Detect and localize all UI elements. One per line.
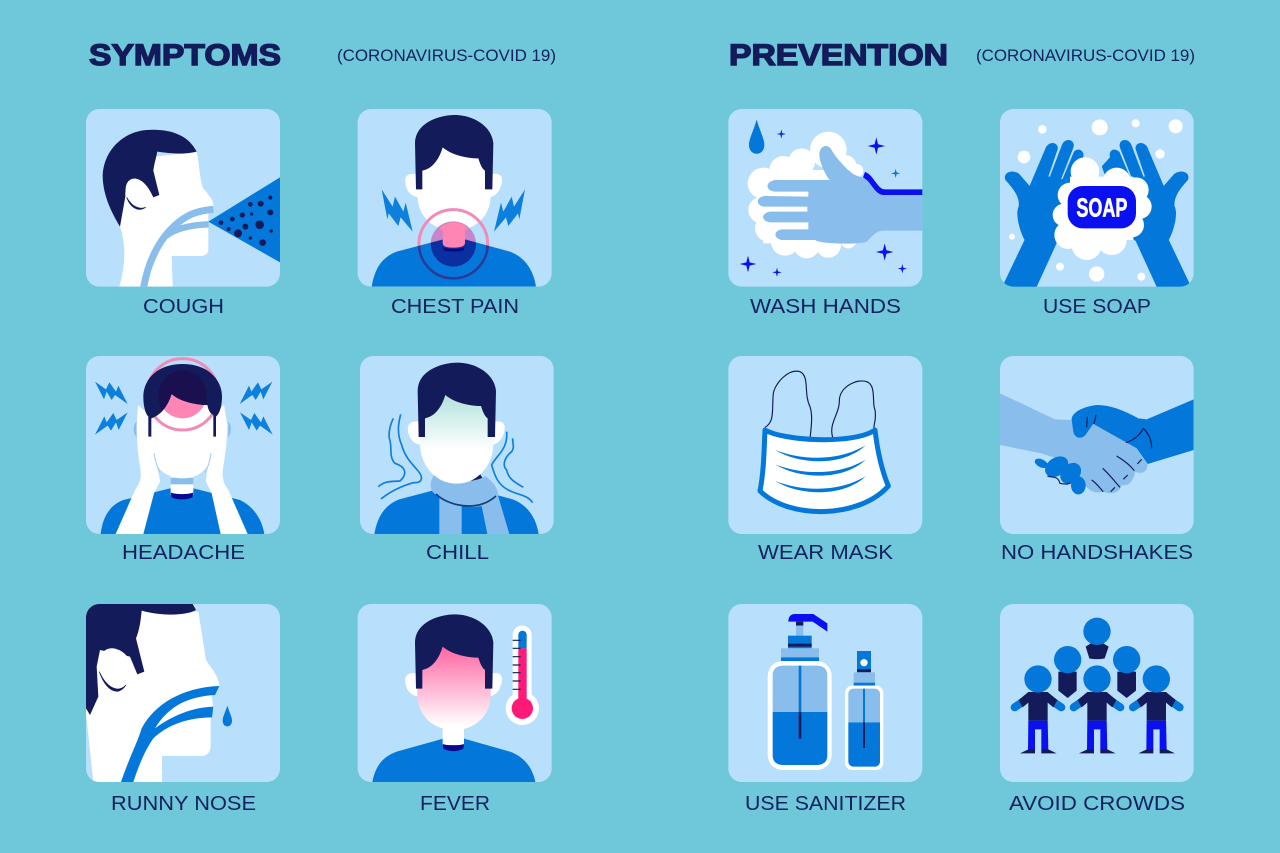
small spray bottle xyxy=(845,651,883,770)
water drop xyxy=(749,119,764,154)
person centre xyxy=(1074,665,1120,753)
label: chill: CHILL xyxy=(426,541,489,564)
panel: headache xyxy=(86,356,280,534)
shirt xyxy=(374,487,539,534)
mask xyxy=(760,430,888,512)
pain bolts xyxy=(95,382,273,435)
finger lines xyxy=(1047,415,1152,492)
label: use soap: USE SOAP xyxy=(1043,295,1151,318)
label: wash hands: WASH HANDS xyxy=(750,295,901,318)
back row bodies xyxy=(1058,643,1136,698)
face xyxy=(417,143,491,231)
foam xyxy=(1053,157,1152,260)
hand shadows xyxy=(154,453,211,473)
nasal passages xyxy=(121,686,232,782)
panel: no handshakes xyxy=(1000,356,1194,534)
label: fever: FEVER xyxy=(420,792,490,815)
label: runny nose: RUNNY NOSE xyxy=(111,792,256,815)
dark arm and hand xyxy=(1072,399,1194,464)
cough droplet cone xyxy=(208,177,280,262)
pain circle xyxy=(164,394,204,418)
panel: use soap xyxy=(1000,109,1194,287)
airway xyxy=(144,209,213,287)
label: wear mask: WEAR MASK xyxy=(758,541,893,564)
panel: fever xyxy=(358,604,552,782)
ear xyxy=(126,178,143,190)
hand xyxy=(758,146,923,244)
shirt xyxy=(101,488,264,534)
back row heads xyxy=(1054,618,1140,673)
pain circles xyxy=(431,221,476,267)
throat xyxy=(439,222,468,248)
ear loops xyxy=(765,371,875,439)
heading: symptoms: SYMPTOMS xyxy=(89,39,281,72)
heading: symptoms: (CORONAVIRUS-COVID 19) xyxy=(337,47,556,65)
foam xyxy=(748,132,863,258)
face in profile xyxy=(119,152,213,287)
panel: chill xyxy=(360,356,554,534)
heading: prevention: PREVENTION xyxy=(729,39,948,72)
heading: symptoms xyxy=(89,39,556,72)
panel: avoid crowds xyxy=(1000,604,1194,782)
panel: use sanitizer xyxy=(728,604,922,782)
panel: wash hands xyxy=(728,109,923,287)
soap bar: SOAP xyxy=(1076,193,1127,223)
droplets xyxy=(219,196,273,246)
bubbles xyxy=(1009,119,1183,282)
neck xyxy=(443,227,465,247)
hair xyxy=(415,115,493,189)
soap bar xyxy=(1068,186,1136,228)
large pump bottle xyxy=(768,614,832,770)
sparkles xyxy=(740,129,907,277)
panel: chest pain xyxy=(358,109,552,287)
shirt xyxy=(372,739,535,782)
neck xyxy=(171,475,193,495)
ears xyxy=(408,421,505,445)
ears xyxy=(405,174,502,197)
label: cough: COUGH xyxy=(143,295,224,318)
panel: cough xyxy=(86,109,280,287)
label: chest pain: CHEST PAIN xyxy=(391,295,519,318)
label: use sanitizer: USE SANITIZER xyxy=(745,792,906,815)
hair xyxy=(86,604,196,715)
neck xyxy=(443,723,464,745)
panel: runny nose xyxy=(86,604,280,782)
ears xyxy=(134,422,231,437)
cold shivers xyxy=(378,414,533,503)
label: no handshakes: NO HANDSHAKES xyxy=(1001,541,1193,564)
scarf xyxy=(431,474,509,534)
panel: wear mask xyxy=(728,356,922,534)
heading: prevention: (CORONAVIRUS-COVID 19) xyxy=(976,47,1195,65)
thermometer xyxy=(506,626,539,725)
label: headache: HEADACHE xyxy=(122,541,245,564)
hands and arms xyxy=(116,405,160,534)
hair xyxy=(103,130,197,227)
right hand xyxy=(1103,141,1188,287)
ear xyxy=(104,648,127,656)
person right xyxy=(1133,665,1180,753)
gripping fingers xyxy=(1033,452,1086,494)
heading: prevention xyxy=(729,39,1195,72)
person left xyxy=(1015,665,1061,753)
dark overlap xyxy=(159,370,207,411)
left hand xyxy=(1005,141,1082,287)
hair xyxy=(418,363,496,437)
label: avoid crowds: AVOID CROWDS xyxy=(1009,792,1185,815)
hair xyxy=(143,364,222,437)
feverish face xyxy=(417,643,491,730)
pleats xyxy=(775,445,866,492)
ears xyxy=(405,673,502,697)
light arm and hand xyxy=(1000,393,1148,493)
face xyxy=(151,405,214,478)
face in profile xyxy=(86,610,219,782)
collar xyxy=(470,474,482,481)
face xyxy=(420,387,493,484)
pain bolts xyxy=(382,189,525,232)
cuff xyxy=(864,175,923,192)
nose drop xyxy=(223,706,232,726)
hair xyxy=(415,614,493,689)
shirt xyxy=(372,239,536,287)
